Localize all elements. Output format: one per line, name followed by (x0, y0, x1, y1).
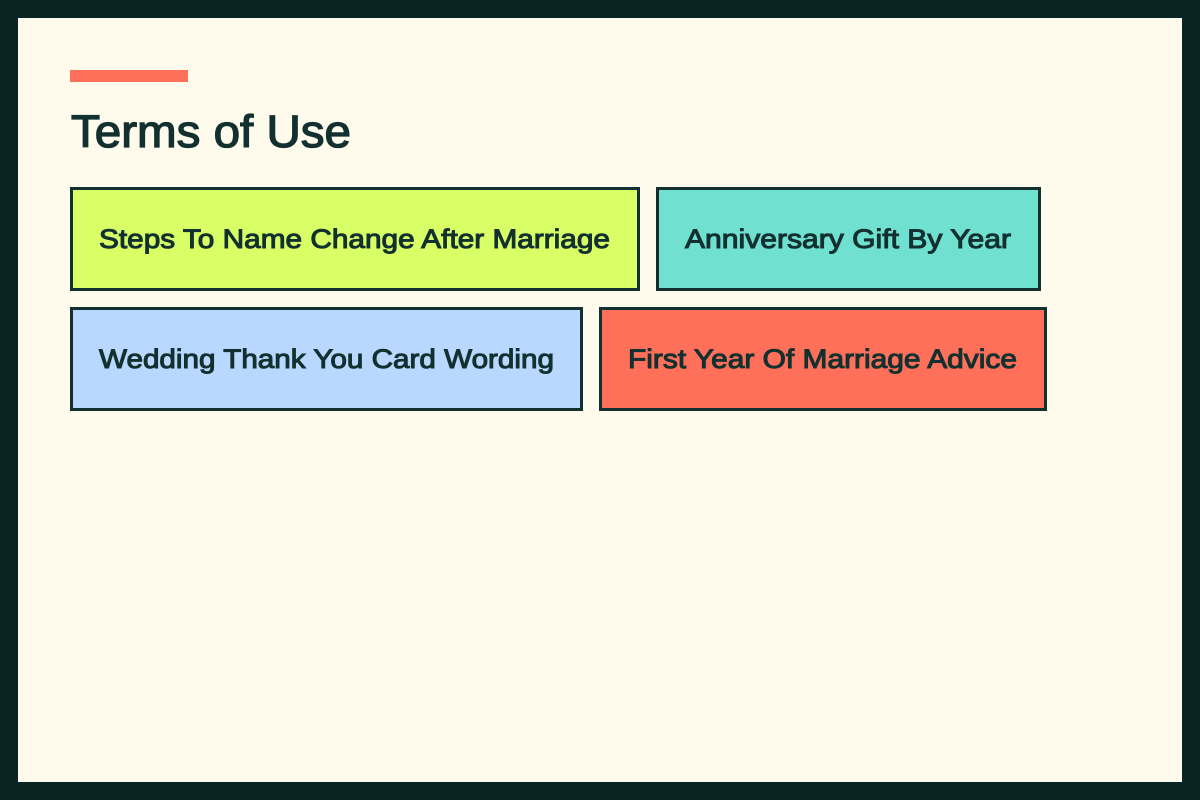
tag: Anniversary Gift By Year: Anniversary Gift By Year (685, 224, 1011, 254)
tag: First Year Of Marriage Advice: First Year Of Marriage Advice (628, 344, 1017, 374)
tag: Steps To Name Change After Marriage (72, 188, 638, 290)
tag: Anniversary Gift By Year (658, 188, 1040, 290)
tag: Steps To Name Change After Marriage: Steps To Name Change After Marriage (99, 224, 610, 254)
tag: Wedding Thank You Card Wording (72, 308, 582, 410)
tag: Wedding Thank You Card Wording: Wedding Thank You Card Wording (99, 344, 554, 374)
accent bar (70, 70, 188, 82)
tag: First Year Of Marriage Advice (600, 308, 1046, 410)
title: Terms of Use (71, 106, 351, 157)
